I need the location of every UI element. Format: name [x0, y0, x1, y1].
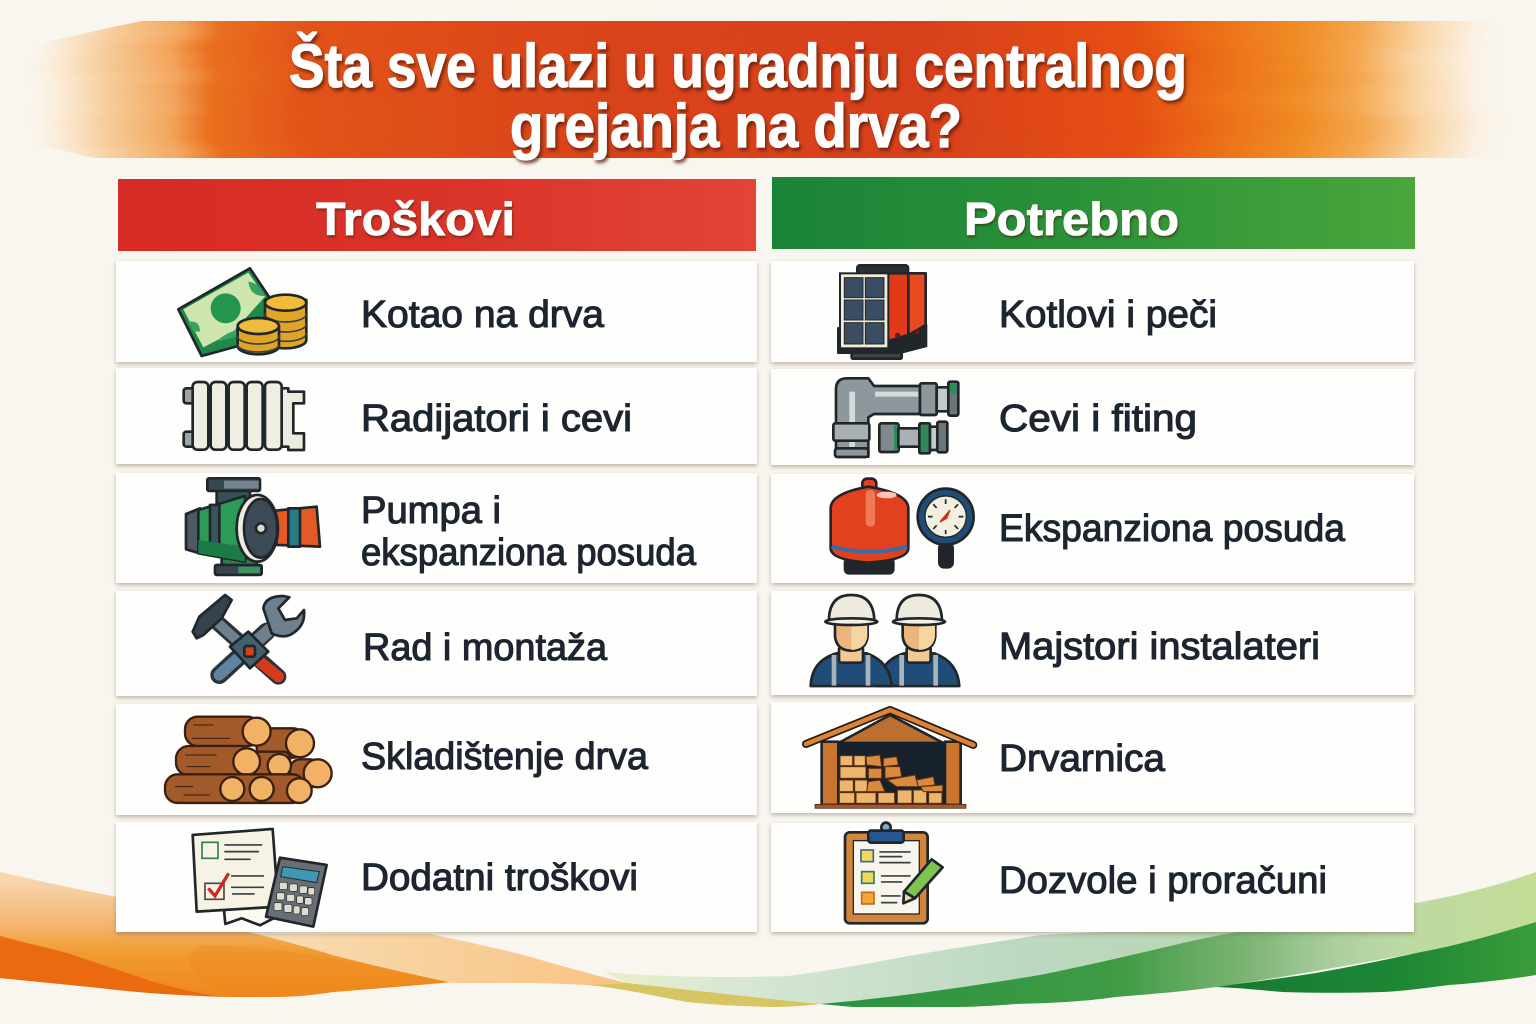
label: Majstori instalateri: Majstori instalateri [999, 626, 1320, 668]
row: Drvarnica [771, 702, 1414, 813]
icon: wood shed [806, 710, 973, 808]
label: Rad i montaža: Rad i montaža [363, 627, 608, 669]
row: Ekspanziona posuda [771, 474, 1414, 583]
icon: documents and calculator [193, 829, 327, 927]
row: Skladištenje drva [116, 704, 757, 815]
icon: stacked logs [165, 717, 332, 803]
icon: pipes and fittings [833, 378, 958, 457]
label: Ekspanziona posuda: Ekspanziona posuda [999, 508, 1346, 550]
row: Dozvole i proračuni [771, 823, 1414, 932]
title text [289, 32, 1187, 160]
title text: Šta sve ulazi u ugradnju centralnog [289, 32, 1187, 100]
row: Rad i montaža [116, 591, 757, 696]
icon: circulation pump [186, 478, 320, 575]
row: Cevi i fiting [771, 369, 1414, 465]
row: Pumpa i ekspanziona posuda [116, 473, 757, 583]
icon: money and coins [178, 268, 306, 356]
label: Dodatni troškovi: Dodatni troškovi [361, 857, 638, 899]
label: Kotlovi i peči: Kotlovi i peči [999, 294, 1217, 336]
icon: clipboard checklist [845, 823, 943, 923]
row: Radijatori i cevi [116, 368, 757, 464]
row: Majstori instalateri [771, 591, 1414, 695]
icon: boiler [838, 265, 926, 359]
label: Pumpa i ekspanziona posuda: ekspanziona posuda [361, 532, 697, 574]
label: Dozvole i proračuni: Dozvole i proračuni [999, 860, 1327, 902]
bottom watercolor ribbon [0, 872, 1536, 1007]
panel: Troškovi [116, 179, 757, 932]
heading: Potrebno [772, 177, 1415, 249]
heading: Potrebno: Potrebno [964, 193, 1179, 245]
label: Kotao na drva: Kotao na drva [361, 294, 605, 336]
label: Pumpa i ekspanziona posuda [361, 490, 697, 574]
icon: two installers [811, 595, 959, 686]
label: Radijatori i cevi: Radijatori i cevi [361, 398, 632, 440]
title banner [20, 21, 1536, 160]
icon: expansion tank and gauge [831, 479, 974, 573]
label: Skladištenje drva: Skladištenje drva [361, 736, 649, 778]
heading: Troškovi: Troškovi [316, 193, 515, 245]
row: Kotlovi i peči [771, 261, 1414, 362]
panel: Potrebno [771, 177, 1415, 932]
row: Kotao na drva [116, 261, 757, 362]
row: Dodatni troškovi [116, 822, 757, 932]
icon: hammer and wrench [193, 595, 304, 677]
icon: radiator [184, 382, 304, 450]
label: Cevi i fiting: Cevi i fiting [999, 398, 1197, 440]
label: Drvarnica: Drvarnica [999, 738, 1166, 780]
label: Pumpa i ekspanziona posuda: Pumpa i [361, 490, 501, 532]
title text: grejanja na drva? [510, 92, 962, 160]
heading: Troškovi [118, 179, 756, 251]
